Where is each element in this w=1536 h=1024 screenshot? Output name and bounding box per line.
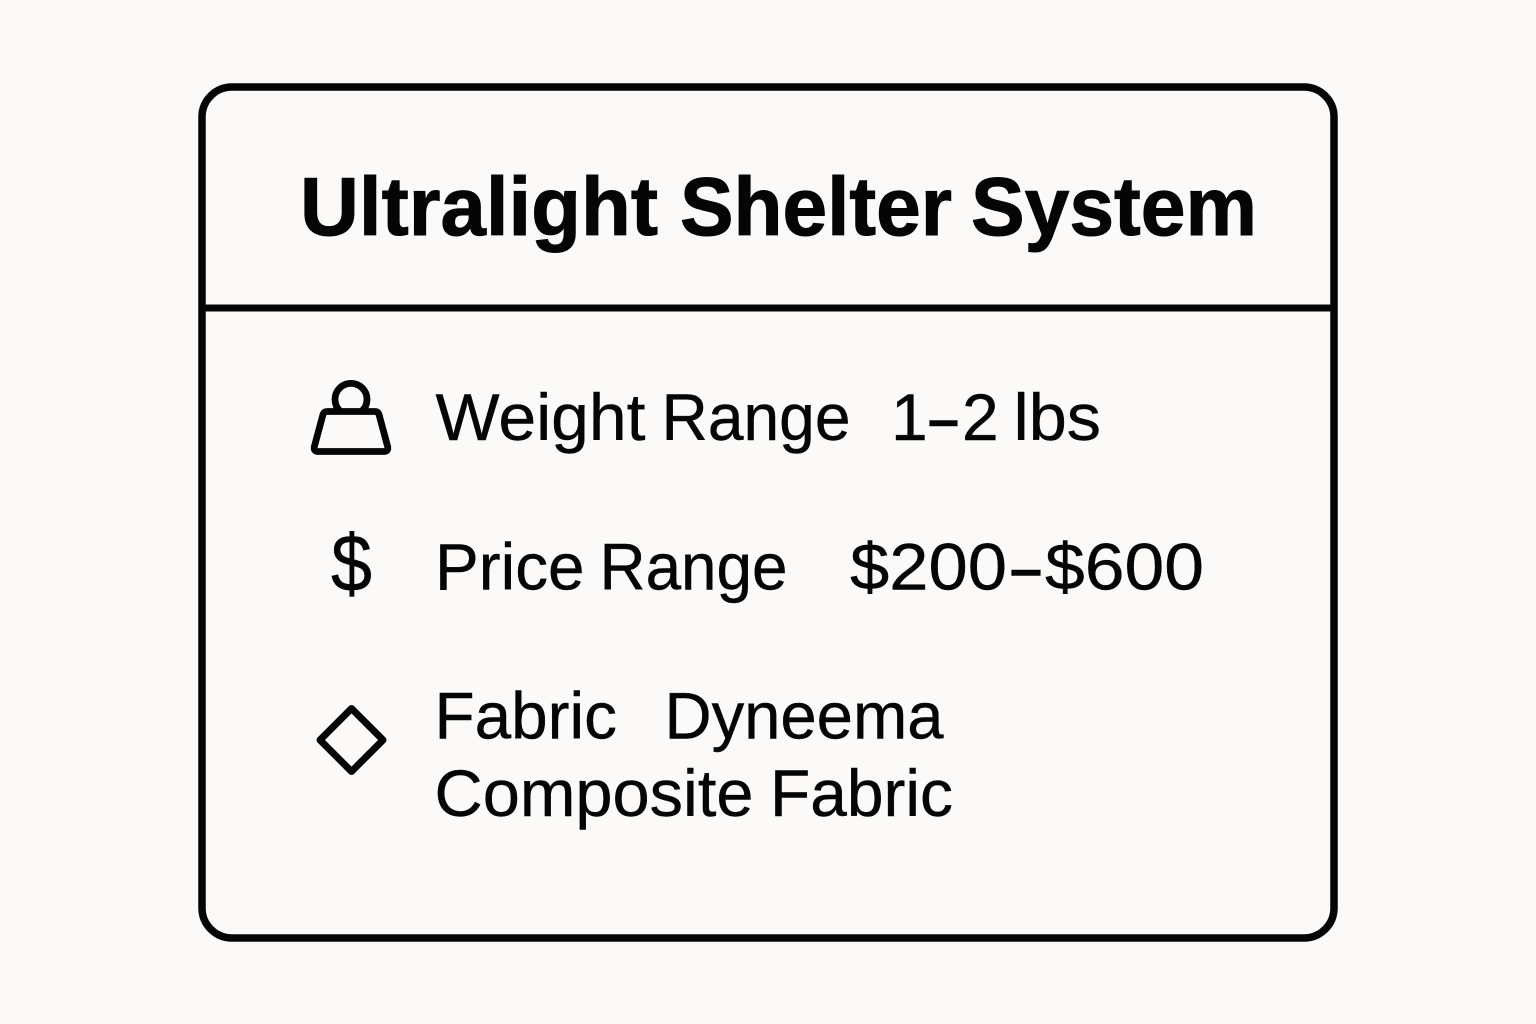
title: Ultralight [300,160,658,253]
weight range row: Weight [436,380,646,454]
price range row: Price [435,530,584,604]
price range row: $200 [850,530,1007,604]
weight range row: 2 [962,380,999,454]
panel: shelter system card [202,87,1334,938]
weight range row: 1 [891,380,928,454]
weight range row [436,380,1101,454]
icon: dollar sign: $ [331,519,372,609]
title: System [971,160,1257,253]
icon: diamond [320,708,383,772]
price range row [435,530,1204,604]
weight range row: – [930,380,957,454]
fabric row: Fabric [770,756,953,830]
fabric row [434,678,953,830]
weight range row: lbs [1014,380,1101,454]
fabric row: Fabric [434,678,617,752]
price range row: – [1012,530,1040,604]
fabric row: Dyneema [664,678,944,752]
price range row: Range [600,530,788,604]
fabric row: Composite [434,756,754,830]
title: Shelter [680,160,952,253]
icon: weight [314,383,388,452]
weight range row: Range [662,380,850,454]
price range row: $600 [1045,530,1204,604]
